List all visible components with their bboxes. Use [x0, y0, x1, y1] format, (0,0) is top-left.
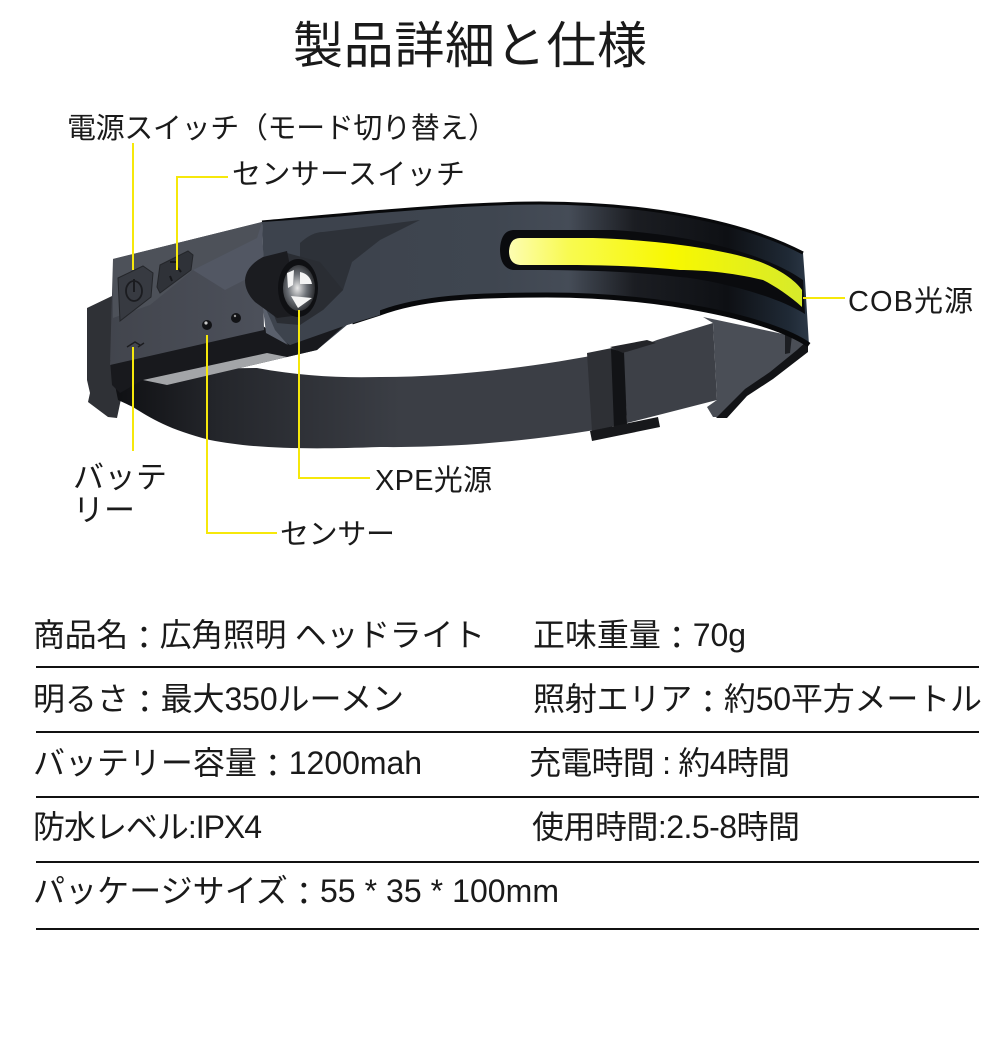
callout: power switch: 電源スイッチ（モード切り替え）	[67, 112, 497, 145]
spec: usage time: 使用時間:2.5-8時間	[532, 809, 800, 845]
housing lower dark section	[110, 323, 347, 393]
headlamp product illustration	[87, 203, 809, 448]
callout: sensor: センサー	[280, 519, 395, 551]
sensor dots	[202, 313, 241, 330]
COB side light	[143, 353, 287, 385]
spec: illuminated area: ：	[692, 684, 724, 720]
spec: net weight: 70g	[693, 617, 746, 653]
spec: brightness: 最大350ルーメン	[161, 681, 404, 717]
housing right face	[262, 214, 380, 345]
power button	[118, 266, 153, 321]
callout: XPE light source: XPE光源	[375, 464, 492, 497]
spec: waterproof level: 防水レベル:IPX4	[33, 809, 262, 845]
housing	[110, 222, 264, 365]
inner band panel	[703, 317, 808, 417]
spec: product name: 広角照明 ヘッドライト	[160, 617, 485, 653]
head band	[262, 203, 809, 357]
spec: package size: パッケージサイズ	[33, 873, 288, 909]
battery indicator mark	[127, 342, 144, 347]
spec: brightness: 明るさ	[33, 681, 129, 717]
spec: battery capacity: 1200mah	[289, 745, 422, 781]
spec: net weight: 正味重量	[533, 617, 661, 653]
spec: package size: 55 * 35 * 100mm	[320, 873, 559, 909]
sensor switch button	[157, 251, 193, 293]
callout: sensor switch: センサースイッチ	[232, 159, 465, 191]
callout: COB light source: COB光源	[848, 285, 973, 318]
callout: battery: バッテ	[73, 460, 167, 495]
callout: battery: リー	[73, 493, 135, 528]
COB light strip	[500, 230, 805, 314]
spec: illuminated area: 約50平方メートル	[724, 681, 982, 717]
spec: brightness: ：	[129, 684, 161, 720]
rear left strap	[87, 296, 125, 418]
spec table	[33, 617, 982, 912]
spec: net weight: ：	[661, 620, 693, 656]
spec: package size: ：	[288, 876, 320, 912]
buckle	[587, 340, 660, 441]
spec: battery capacity: バッテリー容量	[33, 745, 257, 781]
spec: charge time: 充電時間 : 約4時間	[529, 745, 790, 781]
right strap section	[623, 323, 717, 423]
spec: product name: 商品名	[33, 617, 128, 653]
callout: battery	[73, 460, 167, 528]
main strap	[112, 352, 612, 448]
spec: illuminated area: 照射エリア	[533, 681, 692, 717]
housing top facet	[113, 222, 262, 318]
spec: product name: ：	[128, 620, 160, 656]
callout leader lines	[133, 143, 845, 533]
XPE lamp	[245, 251, 343, 325]
title: 製品詳細と仕様	[293, 18, 647, 74]
spec: battery capacity: ：	[257, 748, 289, 784]
